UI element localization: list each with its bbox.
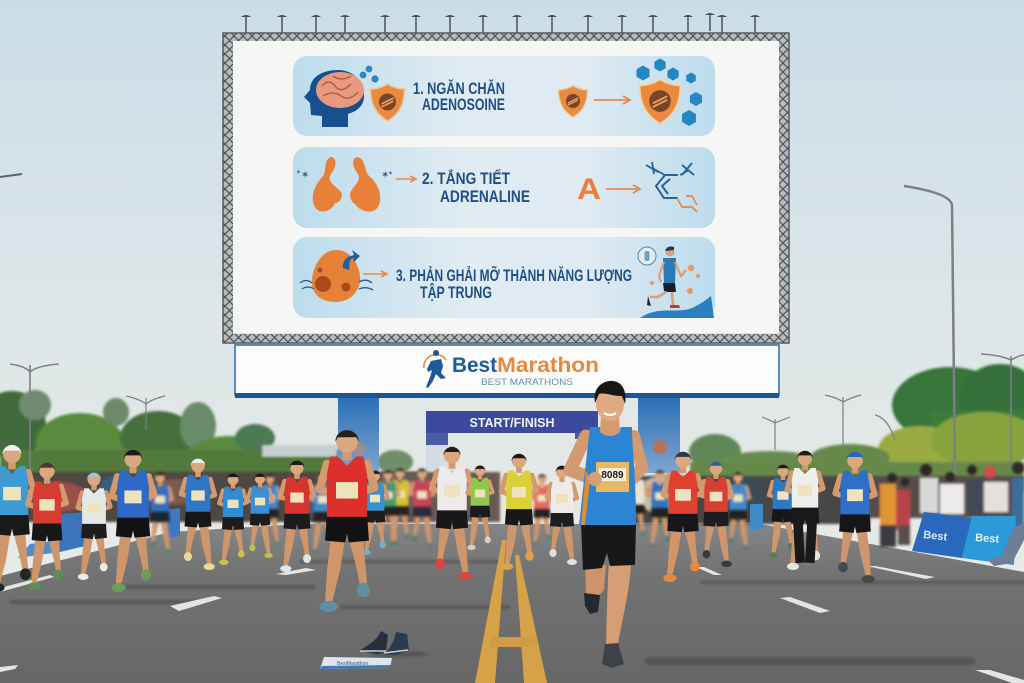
crowd centre and right-centre behind runners xyxy=(380,472,870,524)
runner: white vest woman xyxy=(78,473,110,580)
right leg xyxy=(606,563,631,644)
race bib on the road xyxy=(320,657,392,669)
icon: water circle xyxy=(638,247,656,265)
logo wordmark xyxy=(452,354,599,388)
runner: blue tee xyxy=(219,474,247,565)
runner: red vest left xyxy=(28,463,66,590)
icon: sparkles: ✶ xyxy=(388,170,393,177)
tree line left xyxy=(0,390,413,495)
runner: white vest xyxy=(547,466,577,565)
runner: blue tee xyxy=(247,474,273,558)
runner: white vest xyxy=(432,447,472,580)
icon: energy dots xyxy=(650,265,700,294)
logo wordmark: Best xyxy=(452,354,497,377)
right shoe xyxy=(602,643,624,668)
vest xyxy=(579,427,636,525)
runner: red vest right xyxy=(663,452,703,582)
spectators right xyxy=(868,462,1024,547)
icon: small shield xyxy=(559,86,587,117)
heading: step 1: 1. NGĂN CHĂN xyxy=(413,79,505,98)
hand xyxy=(588,472,602,486)
runners middle row xyxy=(0,430,875,612)
runner: red vest right 2 xyxy=(700,462,732,567)
icon: sparkles: ✶ xyxy=(301,170,309,181)
barriers left xyxy=(18,508,180,558)
icon: letter A: A xyxy=(577,173,601,206)
runner: green vest xyxy=(467,466,493,550)
icon: blue molecules xyxy=(360,66,379,83)
main foreground runner xyxy=(570,381,642,668)
icon: sparkles xyxy=(296,169,393,181)
icon: shield xyxy=(370,84,404,121)
logo wordmark: Marathon xyxy=(497,354,599,377)
runner: yellow vest xyxy=(501,454,537,570)
start/finish gate xyxy=(426,411,598,470)
bottom logo banner xyxy=(235,345,779,398)
left leg xyxy=(585,565,606,597)
heading: step 2: 2. TẮNG TIẾT xyxy=(422,169,510,188)
billboard truss frame xyxy=(223,33,789,343)
icon: sparkles: ✶ xyxy=(296,169,301,176)
runner: white vest black tights xyxy=(787,451,823,570)
top floodlights xyxy=(241,13,760,33)
crowd left behind runners xyxy=(0,472,438,522)
runner: red vest xyxy=(280,461,314,572)
road markings xyxy=(0,540,1024,683)
panel 1: block adenosine xyxy=(293,56,715,136)
runner: large red vest foreground left xyxy=(320,430,374,612)
logo wordmark: BEST MARATHONS xyxy=(481,377,573,388)
logo icon: runner xyxy=(424,350,446,388)
arms xyxy=(570,436,596,480)
arrow xyxy=(396,176,416,182)
icon: hexagon molecules xyxy=(636,58,702,126)
race bib on the road: BestMarathon xyxy=(337,661,368,667)
billboard pillars xyxy=(338,397,680,473)
neck xyxy=(600,416,620,436)
road shadows xyxy=(10,560,1024,665)
icon: adrenal glands xyxy=(313,157,380,212)
left shoe xyxy=(584,593,600,614)
tree line right xyxy=(689,364,1024,492)
arrow xyxy=(606,185,640,193)
seated spectator legs xyxy=(988,522,1024,566)
smile xyxy=(604,413,616,415)
arrow xyxy=(363,271,387,277)
billboard screen xyxy=(233,41,779,333)
chest bib xyxy=(596,462,629,492)
runner: blue tee left xyxy=(0,445,34,592)
distant building xyxy=(262,445,337,457)
panel 2: adrenaline xyxy=(293,147,715,228)
barriers right: Best xyxy=(923,529,948,544)
barriers right xyxy=(750,504,1016,565)
runner: blue vest behind xyxy=(362,471,388,555)
icon: adrenaline molecule xyxy=(646,162,697,212)
runner: blue vest with cap xyxy=(181,459,215,570)
panel 3: fat to energy xyxy=(293,237,715,318)
runner: blue vest xyxy=(112,450,154,592)
start/finish gate: START/FINISH xyxy=(470,415,554,430)
heading: step 3 xyxy=(396,265,632,302)
heading: step 1: ADENOSOINE xyxy=(422,95,505,114)
hair xyxy=(595,381,626,404)
street lights xyxy=(0,174,1024,475)
heading: step 2 xyxy=(422,169,530,206)
chest bib: 8089 xyxy=(601,470,624,481)
runner: blue vest right xyxy=(769,465,797,558)
icon: sparkles: ✶ xyxy=(381,170,389,181)
road surface xyxy=(0,524,1024,683)
runner: blue vest with cap right xyxy=(835,452,875,583)
icon: fat cell xyxy=(300,250,373,302)
heading: step 3: TẬP TRUNG xyxy=(420,283,492,302)
shorts xyxy=(581,524,636,570)
shoes on the road xyxy=(359,631,409,655)
heading: step 2: ADRENALINE xyxy=(440,187,530,206)
heading: step 1 xyxy=(413,79,505,114)
icon: runner xyxy=(647,246,686,308)
barriers right: Best xyxy=(975,532,1000,546)
far runners cluster xyxy=(148,468,750,554)
icon: head with brain xyxy=(304,70,364,127)
heading: step 3: 3. PHẢN GHẢI MỠ THÀNH NĂNG LƯỢNG xyxy=(396,265,632,285)
icon: large shield xyxy=(640,79,680,124)
arrow xyxy=(594,96,630,104)
icon: blue wave xyxy=(640,296,714,318)
head xyxy=(596,387,624,421)
small blurred background runners xyxy=(148,468,750,554)
